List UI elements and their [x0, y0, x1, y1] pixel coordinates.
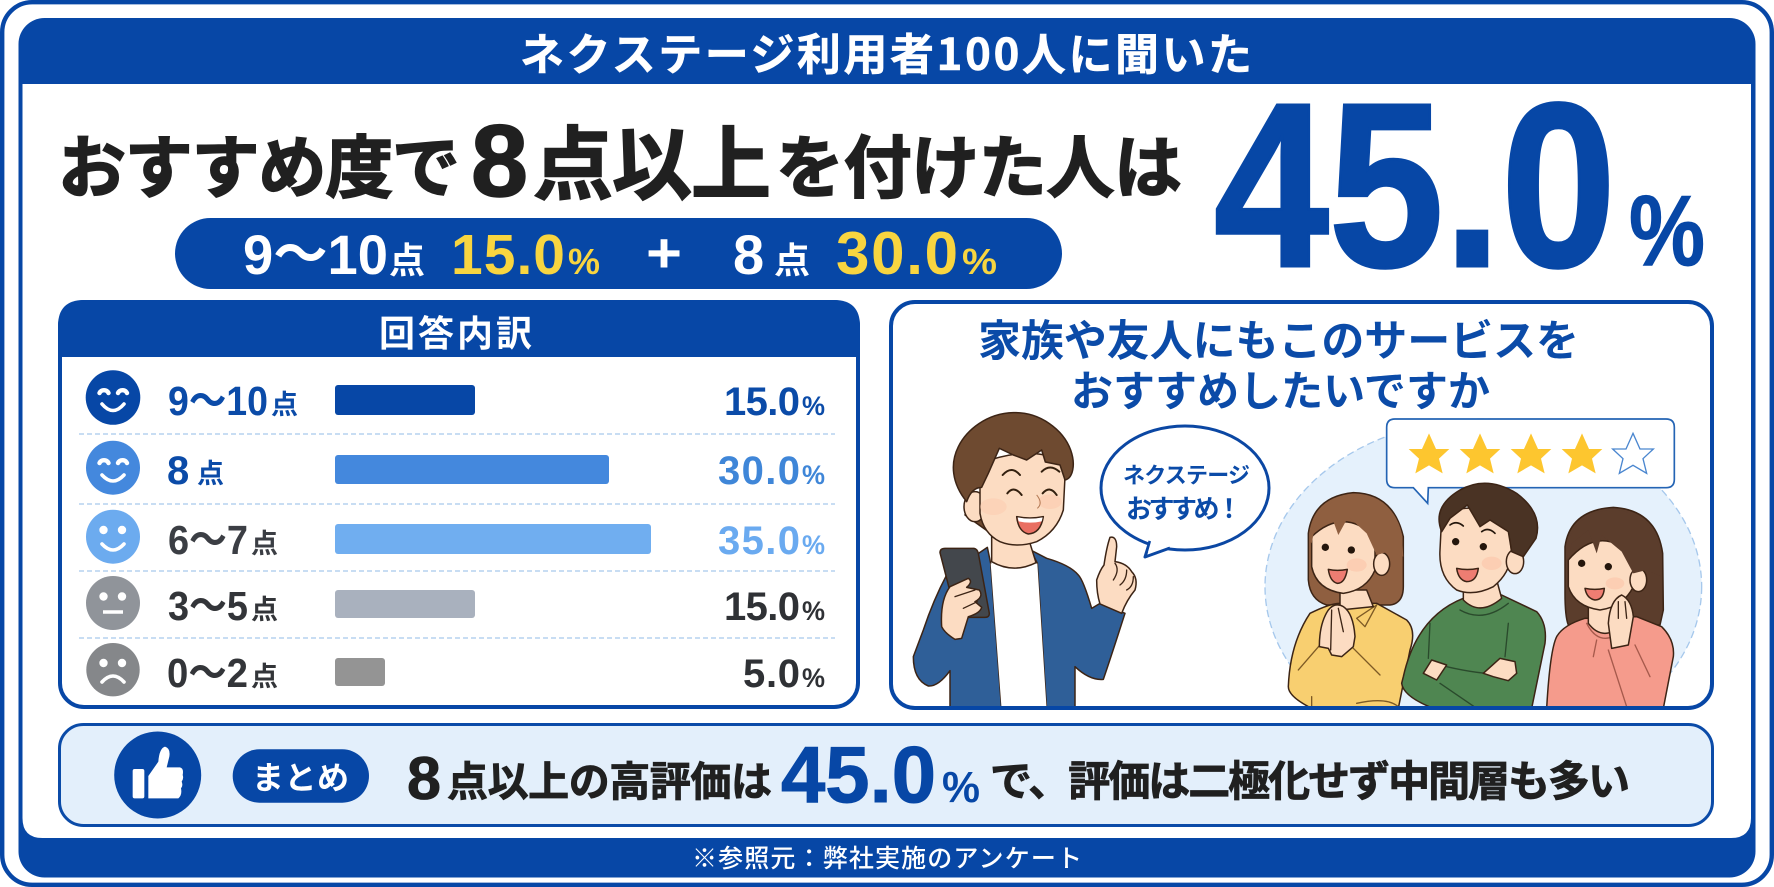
row: 8 points: 30.0	[718, 449, 800, 493]
row: 8 points: %	[802, 460, 825, 490]
row: 3-5 points: 点	[251, 588, 278, 627]
panel heading	[978, 307, 1579, 419]
row: 6-7 points	[86, 510, 825, 564]
row: 9-10 points	[86, 370, 825, 425]
summary sentence: %	[942, 763, 980, 812]
main headline: を付けた人は	[776, 113, 1182, 212]
panel heading: 回答内訳	[379, 305, 532, 357]
top banner title: ネクステージ利用者100人に聞いた	[520, 19, 1252, 83]
panel: response breakdown	[58, 300, 860, 707]
dashed background ellipse	[1264, 436, 1702, 706]
badge: summary	[233, 749, 369, 803]
summary sentence: 45.0	[781, 730, 936, 819]
headline big number: %	[1629, 175, 1705, 287]
green man's hair over rating box	[1439, 483, 1538, 557]
row dividers	[79, 434, 835, 638]
breakdown pill: 点	[389, 232, 425, 284]
panel heading: 家族や友人にもこのサービスを	[978, 307, 1579, 369]
row: 6-7 points: %	[802, 530, 825, 560]
row: 6-7 points: 35.0	[718, 519, 800, 563]
row: 3-5 points	[86, 576, 825, 630]
row: 9-10 points: 9〜10	[168, 378, 268, 424]
breakdown pill: 15.0	[451, 223, 565, 287]
woman in yellow	[1288, 493, 1413, 708]
summary sentence	[407, 730, 1630, 819]
panel: recommendation illustration	[891, 302, 1712, 754]
row: 8 points: 8	[167, 449, 189, 493]
main headline: 点以上	[533, 101, 771, 217]
illustration	[912, 412, 1702, 706]
panel header	[58, 300, 860, 357]
badge: summary: まとめ	[252, 753, 349, 799]
speech bubble: recommendation: おすすめ！	[1126, 489, 1242, 526]
panel heading: おすすめしたいですか	[1071, 358, 1490, 419]
row: 8 points: 点	[197, 452, 224, 491]
speech bubble: recommendation: ネクステージ	[1123, 458, 1250, 490]
row: 0-2 points: 0〜2	[167, 650, 248, 696]
breakdown pill: %	[568, 241, 600, 282]
speech bubble: recommendation	[1101, 426, 1269, 557]
summary sentence: で、評価は二極化せず中間層も多い	[990, 748, 1630, 809]
row: 3-5 points: %	[802, 596, 825, 626]
main headline: 8	[471, 104, 528, 218]
row: 9-10 points: %	[802, 391, 825, 421]
row: 3-5 points: 15.0	[724, 585, 800, 629]
main headline	[58, 101, 1182, 218]
row: 6-7 points: 6〜7	[168, 517, 248, 563]
main headline: おすすめ度で	[58, 113, 460, 212]
icon: thumbs up	[114, 732, 201, 818]
woman in pink	[1547, 507, 1674, 708]
panel outline	[891, 302, 1712, 708]
panel: summary	[60, 724, 1712, 826]
breakdown pill: 8	[733, 223, 764, 286]
headline big number: 45.0	[1214, 54, 1616, 316]
summary sentence: 8	[407, 745, 441, 812]
breakdown pill: 9〜10	[243, 223, 388, 286]
row: 8 points	[86, 441, 825, 495]
breakdown pill: +	[646, 221, 682, 284]
man pointing with smartphone	[913, 413, 1136, 710]
man in green	[1402, 508, 1545, 708]
breakdown pill: 点	[774, 232, 810, 284]
breakdown pill	[175, 218, 1062, 289]
row: 9-10 points: 15.0	[724, 380, 800, 424]
row: 6-7 points: 点	[251, 522, 278, 561]
row: 0-2 points: %	[802, 663, 825, 693]
rating speech box	[1387, 419, 1674, 503]
breakdown pill: %	[962, 241, 997, 282]
group of three people with rating	[1264, 418, 1702, 706]
row: 3-5 points: 3〜5	[168, 583, 248, 629]
breakdown pill: 30.0	[836, 220, 958, 287]
row: 9-10 points: 点	[271, 383, 298, 422]
row: 0-2 points: 5.0	[743, 652, 800, 696]
footer source note: ※参照元：弊社実施のアンケート	[692, 839, 1082, 875]
summary sentence: 点以上の高評価は	[447, 748, 772, 808]
row: 0-2 points: 点	[251, 655, 278, 694]
row: 0-2 points	[86, 643, 825, 696]
